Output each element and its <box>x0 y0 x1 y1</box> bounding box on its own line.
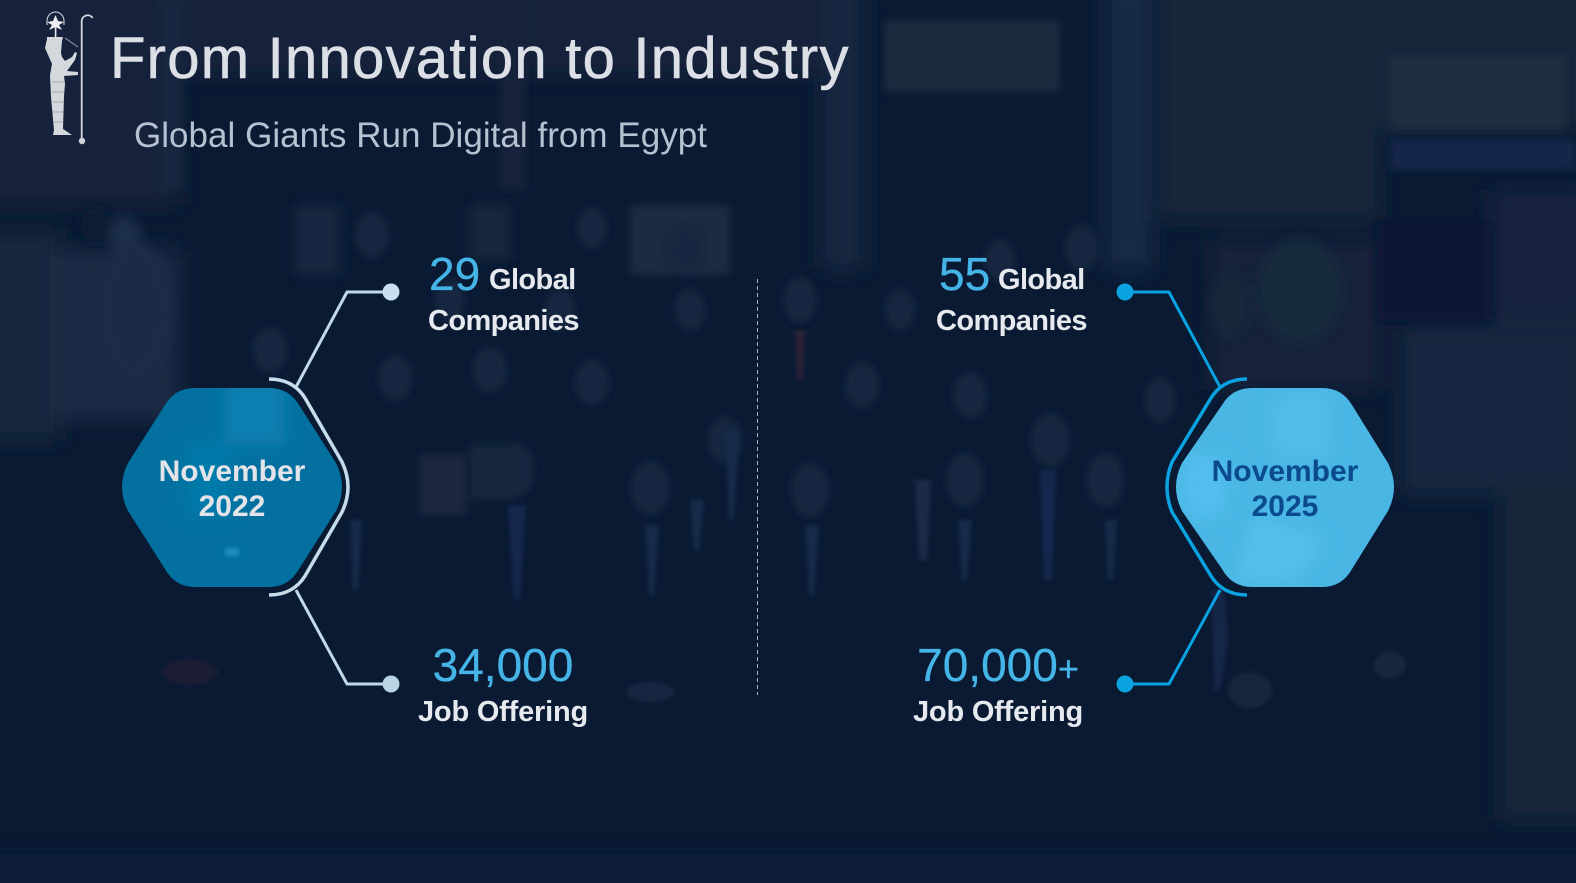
stat: 70,000+ Job Offering: 70,000+ <box>917 639 1079 691</box>
label: November 2022: 2022 <box>199 490 265 523</box>
panel: November 2025 <box>913 248 1394 728</box>
label: November 2022: November <box>159 455 305 488</box>
stat: 55 Global Companies: 55 <box>939 248 990 300</box>
stat: 70,000+ Job Offering <box>913 639 1083 728</box>
panel: November 2022 <box>122 248 588 728</box>
label: November 2025: 2025 <box>1252 490 1318 523</box>
title: From Innovation to Industry <box>110 26 850 91</box>
hexagon and connectors 2022 <box>122 284 400 692</box>
stat: 29 Global Companies: 29 <box>429 248 480 300</box>
stat: 34,000 Job Offering: Job Offering <box>418 696 588 728</box>
stat: 55 Global Companies <box>936 248 1087 337</box>
stat: 55 Global Companies: Global <box>998 264 1085 296</box>
stat: 29 Global Companies <box>428 248 579 337</box>
stat: 29 Global Companies: Companies <box>428 305 579 337</box>
stat: 70,000+ Job Offering: Job Offering <box>913 696 1083 728</box>
label: November 2022 <box>159 455 305 523</box>
stat: 34,000 Job Offering: 34,000 <box>433 639 573 691</box>
stat: 29 Global Companies: Global <box>489 264 576 296</box>
stat: 55 Global Companies: Companies <box>936 305 1087 337</box>
label: November 2025 <box>1212 455 1358 523</box>
icon: Egyptian goddess Seshat with staff <box>45 12 94 144</box>
stat: 34,000 Job Offering <box>418 639 588 728</box>
subtitle: Global Giants Run Digital from Egypt <box>134 116 707 155</box>
hexagon and connectors 2025 <box>1116 284 1394 692</box>
label: November 2025: November <box>1212 455 1358 488</box>
